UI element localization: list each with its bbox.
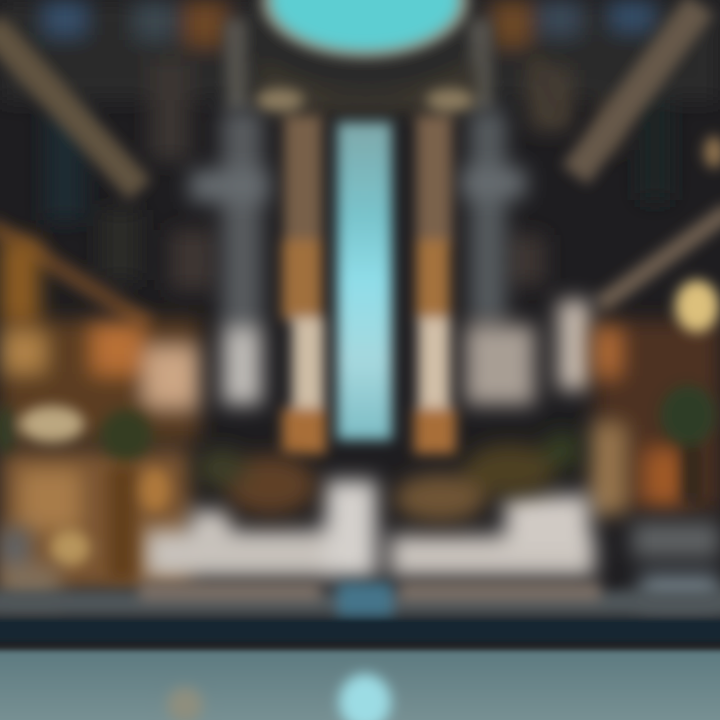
white floor patches xyxy=(145,480,595,578)
skylight: cyan dome xyxy=(260,0,475,112)
ceiling beams xyxy=(0,5,720,325)
warm central columns xyxy=(256,89,474,454)
right plant xyxy=(660,385,716,505)
grey side columns xyxy=(190,110,590,405)
reflective floor xyxy=(0,650,720,720)
planters xyxy=(196,432,582,522)
lower side benches xyxy=(0,522,720,607)
central cyan light column xyxy=(337,122,392,440)
right warm wall lights xyxy=(590,320,720,515)
left plants xyxy=(0,406,170,580)
ceiling structure xyxy=(0,0,720,290)
right glowing lamp xyxy=(675,136,720,332)
dark band xyxy=(0,618,720,642)
left warm wall lights xyxy=(0,240,200,590)
ledge xyxy=(0,582,720,618)
